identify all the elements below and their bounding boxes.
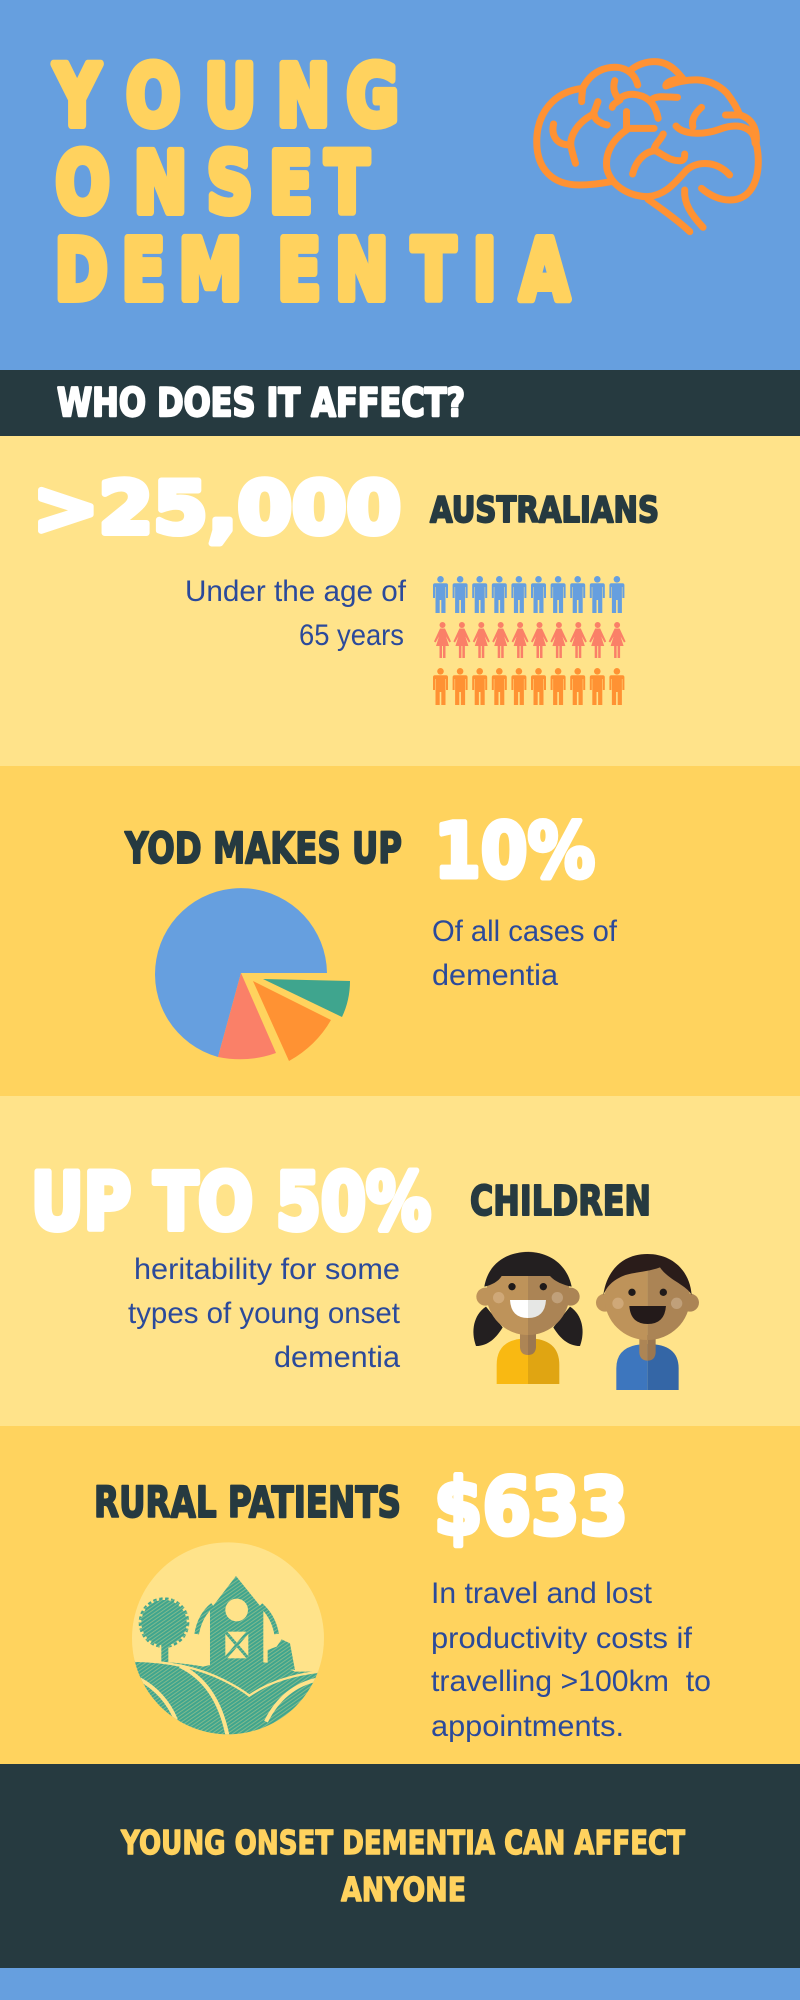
heading: children: CHILDREN xyxy=(470,1177,651,1225)
text: heritability: types of young onset xyxy=(128,1297,401,1330)
title: YOUNG xyxy=(53,47,399,145)
big number: up to 50%: UP TO 50% xyxy=(31,1158,431,1248)
panel: header background xyxy=(0,0,800,370)
panel: who does it affect banner xyxy=(0,370,800,436)
text: heritability: dementia xyxy=(274,1341,400,1374)
text: under the age: 65 years xyxy=(299,619,404,652)
text: under the age: Under the age of xyxy=(185,575,407,608)
big number: $633: $633 xyxy=(434,1463,628,1553)
big number: 25,000: >25,000 xyxy=(33,466,401,550)
icon: people rows xyxy=(433,576,626,705)
panel: ten percent xyxy=(0,766,800,1096)
text: travel costs: travelling >100km to xyxy=(431,1665,711,1698)
text: travel costs: productivity costs if xyxy=(431,1622,693,1655)
title: DEMENTIA xyxy=(55,221,569,319)
text: under the age xyxy=(185,575,407,652)
pie chart xyxy=(155,888,350,1061)
text: footer statement xyxy=(120,1823,685,1909)
big number: 10%: 10% xyxy=(434,806,595,895)
text: of all cases: dementia xyxy=(432,959,558,992)
title xyxy=(53,47,569,319)
panel: bottom strip xyxy=(0,1968,800,2000)
icon: brain xyxy=(537,62,758,232)
heading: who does it affect: WHO DOES IT AFFECT? xyxy=(57,381,465,426)
text: travel costs: appointments. xyxy=(431,1710,624,1743)
text: travel costs: In travel and lost xyxy=(431,1577,653,1610)
text: heritability xyxy=(128,1253,401,1374)
text: footer statement: ANYONE xyxy=(341,1870,466,1909)
icon: two children xyxy=(473,1252,699,1390)
text: travel costs xyxy=(431,1577,711,1743)
text: of all cases: Of all cases of xyxy=(432,915,618,948)
panel: australians xyxy=(0,436,800,766)
panel: children xyxy=(0,1096,800,1426)
text: heritability: heritability for some xyxy=(134,1253,400,1286)
icon: farm xyxy=(132,1542,324,1734)
title: ONSET xyxy=(55,134,369,232)
heading: rural patients: RURAL PATIENTS xyxy=(94,1478,401,1528)
heading: yod makes up: YOD MAKES UP xyxy=(124,824,402,874)
panel: rural patients xyxy=(0,1426,800,1764)
text: of all cases xyxy=(432,915,618,992)
heading: australians: AUSTRALIANS xyxy=(430,490,659,531)
panel: footer xyxy=(0,1764,800,1968)
